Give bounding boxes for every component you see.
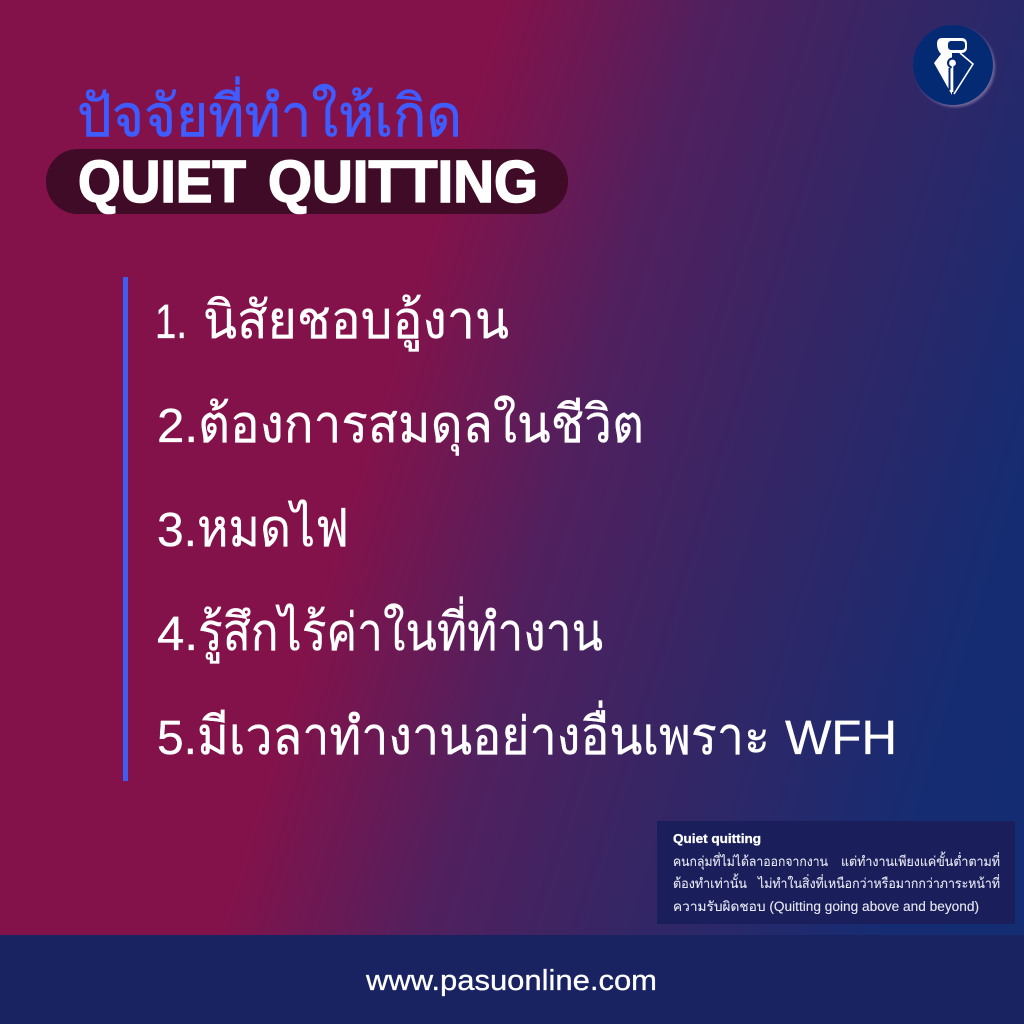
definition body: ไม่ทำในสิ่งที่เหนือกว่าหรือมากกว่าภาระหน้าที่ [757, 874, 1000, 891]
definition box [657, 821, 1015, 924]
definition body: แต่ทำงานเพียงแค่ขั้นต่ำตามที่ [841, 851, 1000, 869]
item 4: รู้สึกไร้ค่าในที่ทำงาน [198, 596, 603, 664]
definition heading: Quiet quitting [673, 832, 761, 846]
title pill: QUIET QUITTING: QUIET [78, 149, 246, 215]
factor list [155, 292, 897, 766]
list accent bar [123, 277, 128, 781]
item 1: นิสัยชอบอู้งาน [203, 292, 509, 352]
website address: www.pasuonline.com [365, 965, 657, 997]
definition body [673, 851, 1000, 914]
definition body: ต้องทำเท่านั้น [673, 873, 747, 891]
definition body: คนกลุ่มที่ไม่ได้ลาออกจากงาน [673, 852, 828, 870]
item 5: WFH [785, 712, 897, 765]
title pill: QUIET QUITTING: QUITTING [268, 149, 538, 215]
title pill: QUIET QUITTING [46, 149, 568, 215]
item 4: 4. [157, 608, 198, 661]
item 3: หมดไฟ [197, 499, 349, 558]
title: Thai heading: ปัจจัยที่ทำให้เกิด [77, 76, 462, 149]
item 2: 2. [157, 400, 198, 453]
item 5: มีเวลาทำงานอย่างอื่นเพราะ [197, 700, 770, 766]
item 1: 1. [155, 296, 187, 349]
item 2: ต้องการสมดุลในชีวิต [198, 395, 644, 456]
footer bar [0, 935, 1024, 1024]
logo: pen nib badge [913, 25, 995, 107]
item 3: 3. [157, 504, 197, 557]
definition body: ความรับผิดชอบ (Quitting going above and beyond) [673, 899, 979, 914]
item 5: 5. [157, 712, 197, 765]
